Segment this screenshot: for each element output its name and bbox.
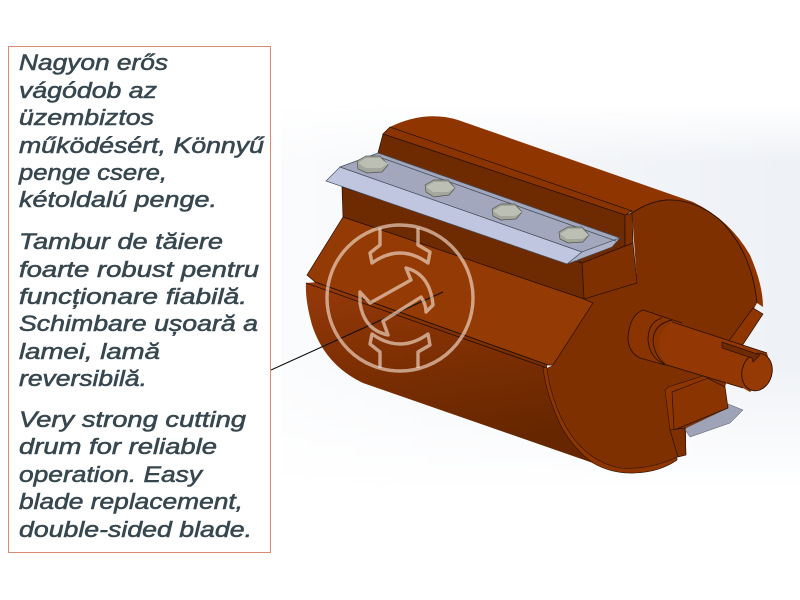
English text: Very strong cutting [19, 407, 247, 432]
blade end [567, 238, 620, 264]
right lobe piece [728, 308, 763, 346]
blade plate line [382, 158, 616, 241]
face rim lines [632, 200, 757, 303]
bolt 4 [559, 227, 589, 243]
bolt 1 [357, 156, 388, 173]
Hungarian text: vágódob az [19, 78, 157, 103]
drum end face [547, 200, 757, 468]
lower blade [685, 404, 743, 437]
Romanian text: foarte robust pentru [19, 257, 259, 282]
Hungarian text: kétoldalú penge. [19, 187, 217, 212]
Hungarian text: üzembiztos [19, 105, 154, 130]
lower rim [543, 367, 677, 473]
English text: operation. Easy [19, 462, 204, 487]
Romanian text: Schimbare ușoară a [19, 311, 258, 336]
English text: drum for reliable [19, 434, 217, 459]
lower seat wall [342, 187, 584, 299]
flange collar arc [648, 318, 672, 366]
Romanian text: funcționare fiabilă. [19, 284, 247, 309]
top drum lobe [390, 116, 763, 307]
blade support block [582, 243, 637, 299]
blade top plate [340, 153, 620, 252]
shaft flange outline [628, 310, 682, 365]
lower holder foot [670, 428, 686, 457]
Hungarian text: működésért, Könnyű [19, 133, 265, 158]
Romanian text: lamei, lamă [19, 339, 160, 364]
Romanian text: Tambur de tăiere [19, 229, 223, 254]
Romanian text [19, 229, 259, 391]
watermark logo [327, 225, 473, 371]
Romanian text: reversibilă. [19, 366, 147, 391]
shaft body [659, 322, 772, 392]
callout leader line [271, 292, 443, 370]
background shading [281, 105, 800, 490]
Hungarian text [18, 50, 265, 212]
English text [19, 407, 252, 542]
English text: double-sided blade. [19, 517, 252, 542]
middle drum panel [307, 217, 593, 365]
blade seat dark wall [378, 134, 625, 263]
cutting drum illustration [306, 116, 776, 473]
English text: blade replacement, [19, 489, 243, 514]
keyway [722, 342, 760, 362]
lower holder lip [665, 375, 708, 430]
Hungarian text: Nagyon erős [19, 50, 168, 75]
lower drum lobe [306, 282, 593, 463]
top lobe step strip [383, 127, 632, 215]
Hungarian text: penge csere, [18, 160, 167, 185]
text panel [8, 46, 270, 552]
bolt 2 [425, 180, 455, 197]
bolt 3 [492, 204, 522, 220]
blade bevel [326, 167, 582, 264]
groove lines [306, 282, 548, 368]
lower holder wall [672, 378, 728, 430]
shaft outline [667, 322, 767, 388]
shaft flange [628, 310, 682, 366]
knife blade [326, 153, 620, 264]
seat end column [625, 213, 633, 246]
shaft end [738, 350, 776, 394]
